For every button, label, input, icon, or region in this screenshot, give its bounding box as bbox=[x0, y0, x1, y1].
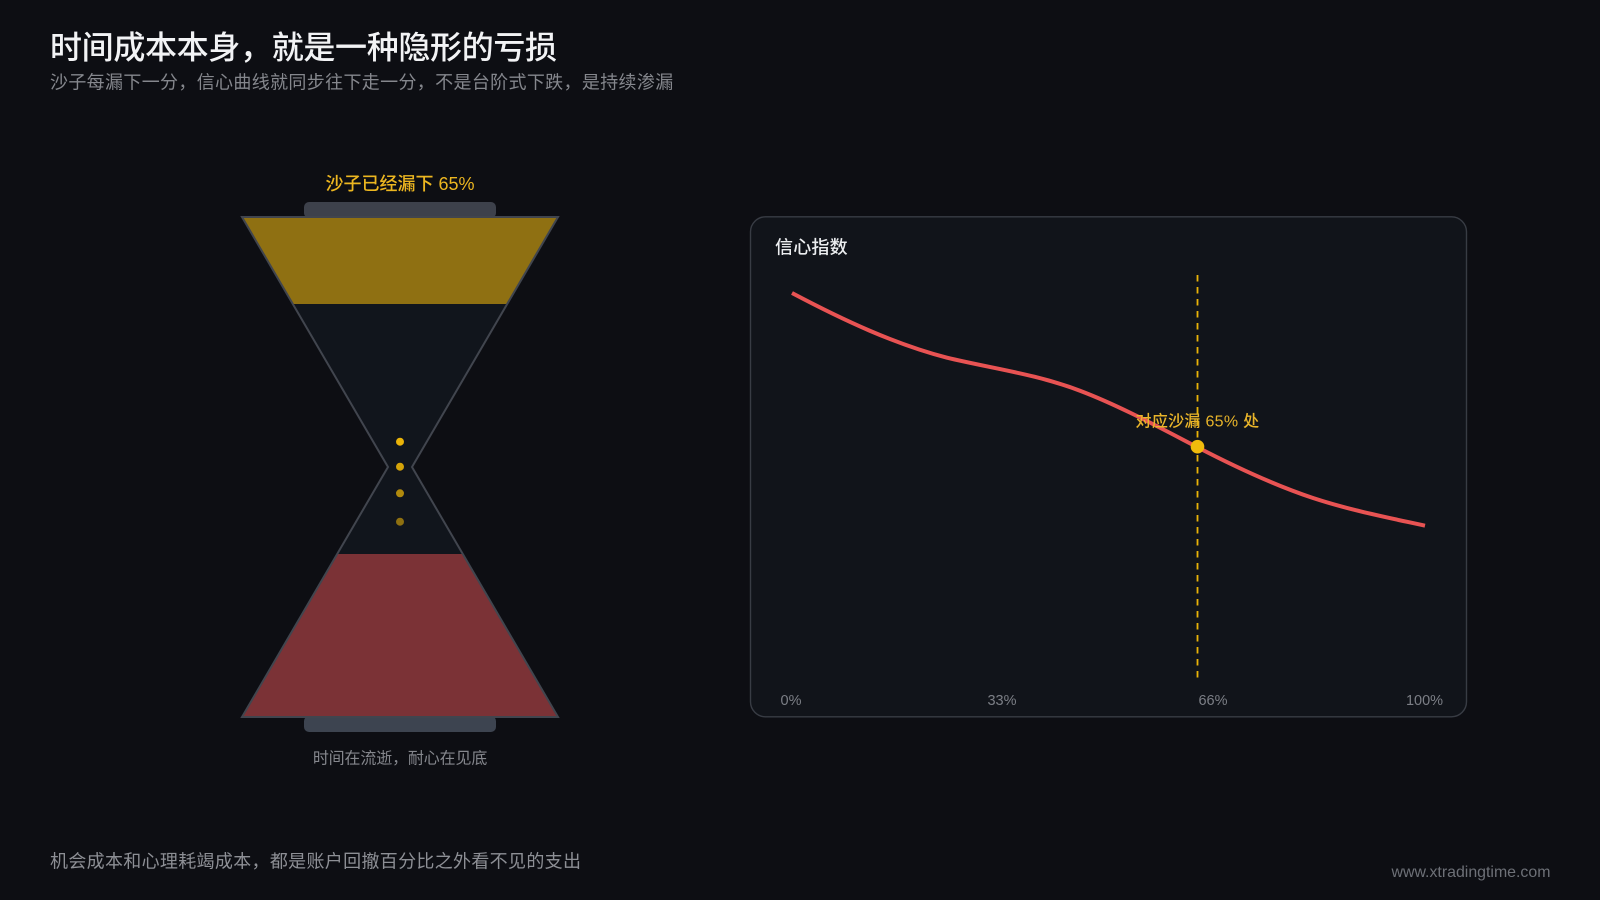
x axis labels bbox=[781, 693, 1443, 709]
glass body bbox=[242, 217, 558, 717]
hourglass panel bbox=[242, 174, 558, 768]
top sand bbox=[242, 217, 558, 304]
glass outline bbox=[242, 217, 558, 717]
footer note: 机会成本和心理耗竭成本，都是账户回撤百分比之外看不见的支出 bbox=[50, 852, 581, 872]
hourglass caption: 时间在流逝，耐心在见底 bbox=[313, 750, 487, 768]
title: 时间成本本身，就是一种隐形的亏损 bbox=[50, 30, 557, 66]
x axis labels: 100% bbox=[1406, 693, 1443, 709]
marker label: 对应沙漏 65% 处 bbox=[1136, 412, 1259, 430]
panel: confidence index chart bbox=[750, 217, 1466, 717]
subtitle: 沙子每漏下一分，信心曲线就同步往下走一分，不是台阶式下跌，是持续渗漏 bbox=[50, 72, 674, 92]
x axis labels: 66% bbox=[1198, 693, 1228, 709]
dashed marker line bbox=[1196, 275, 1198, 678]
falling sand dots bbox=[396, 438, 404, 526]
x axis labels: 33% bbox=[987, 693, 1017, 709]
confidence curve bbox=[792, 293, 1425, 526]
hourglass label: 沙子已经漏下 65% bbox=[325, 174, 475, 194]
top cap bbox=[304, 202, 496, 218]
bottom cap bbox=[304, 716, 496, 732]
card background bbox=[750, 217, 1466, 717]
x axis labels: 0% bbox=[781, 693, 802, 709]
marker dot bbox=[1191, 440, 1204, 454]
website: www.xtradingtime.com bbox=[1390, 864, 1550, 881]
card title: 信心指数 bbox=[775, 238, 848, 258]
bottom sand bbox=[242, 554, 558, 717]
